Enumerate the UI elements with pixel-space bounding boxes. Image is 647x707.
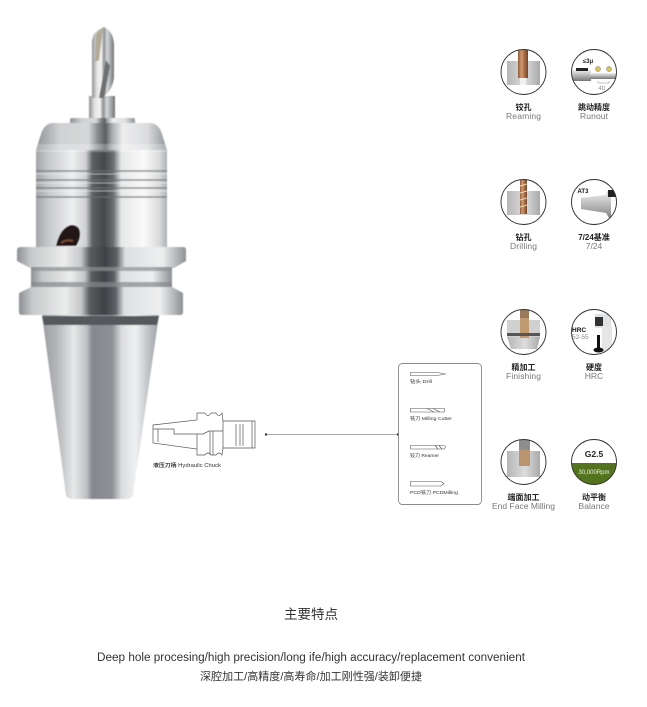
feature: drilling: 钻孔	[516, 232, 532, 242]
feature: reaming: 铰孔	[516, 102, 532, 112]
tool: drill	[410, 372, 446, 385]
tool: drill: 钻头 Drill	[410, 378, 432, 385]
upper flange	[17, 247, 186, 268]
feature: finishing: 精加工	[512, 362, 536, 372]
icon: hardness tester: 52-55	[572, 334, 589, 341]
feature: finishing	[501, 308, 546, 381]
feature: drilling	[501, 178, 546, 251]
coolant hole	[56, 225, 80, 246]
icon: hardness tester	[572, 314, 612, 352]
drawing caption: 液压刀柄 Hydraulic Chuck	[153, 462, 222, 469]
tool: milling cutter: 铣刀 Milling Cutter	[410, 415, 453, 422]
icon: reaming	[507, 50, 540, 85]
feature: balance	[571, 439, 617, 511]
line drawing: hydraulic chuck	[153, 413, 255, 455]
feature: HRC	[571, 309, 617, 381]
feature: runout: Runout	[580, 111, 609, 121]
feature: end face milling	[492, 438, 555, 511]
icon: balance G2.5: 30,000Rpm	[578, 470, 610, 476]
product photo: hydraulic chuck	[17, 27, 186, 499]
feature: 7/24: 7/24	[586, 241, 603, 251]
grooves	[36, 171, 167, 197]
connector arrow	[265, 433, 399, 436]
panel: compatible tools	[398, 364, 482, 504]
cutting tool	[89, 27, 115, 119]
flange groove	[31, 267, 172, 288]
icon: end face milling	[507, 440, 540, 477]
icon: runout	[572, 58, 616, 90]
feature: runout: 跳动精度	[578, 102, 610, 112]
feature: drilling: Drilling	[510, 241, 537, 251]
icon: drilling	[507, 180, 540, 215]
icon: balance G2.5: G2.5	[585, 449, 603, 459]
icon: runout: ≤3μ	[583, 59, 593, 65]
tool: milling cutter	[410, 408, 453, 422]
feature: reaming: Reaming	[506, 111, 541, 121]
tool: reamer	[410, 446, 446, 459]
feature: balance: Balance	[578, 501, 610, 511]
taper shank	[42, 315, 159, 499]
feature: 7/24	[571, 179, 617, 251]
feature: HRC: 硬度	[586, 362, 602, 372]
feature: reaming	[501, 48, 546, 121]
Chinese description: 深腔加工/高精度/高寿命/加工刚性强/装卸便捷	[200, 669, 422, 683]
icon: taper AT3: AT3	[578, 189, 589, 195]
lower flange	[19, 287, 183, 315]
tool: PCD milling	[410, 482, 458, 496]
feature: runout	[571, 49, 617, 121]
heading: 主要特点	[284, 607, 338, 622]
top collar ring	[70, 118, 135, 124]
feature: end face milling: End Face Milling	[492, 501, 555, 511]
tool: PCD milling: PCD铣刀 PCDMilling	[410, 489, 458, 496]
feature: balance: 动平衡	[582, 492, 606, 502]
chuck body	[36, 150, 167, 248]
icon: hardness tester: HRC	[572, 327, 586, 334]
icon: finishing	[507, 310, 540, 349]
icon: balance G2.5	[572, 451, 616, 484]
feature: 7/24: 7/24基准	[578, 232, 610, 242]
feature: end face milling: 端面加工	[508, 492, 540, 502]
English description: Deep hole procesing/high precision/long ife/high accuracy/replacement convenient	[97, 652, 526, 664]
tool: reamer: 铰刀 Reamer	[410, 452, 439, 459]
icon: runout: 4D	[598, 86, 606, 92]
feature: finishing: Finishing	[506, 371, 541, 381]
feature: HRC: HRC	[585, 371, 603, 381]
